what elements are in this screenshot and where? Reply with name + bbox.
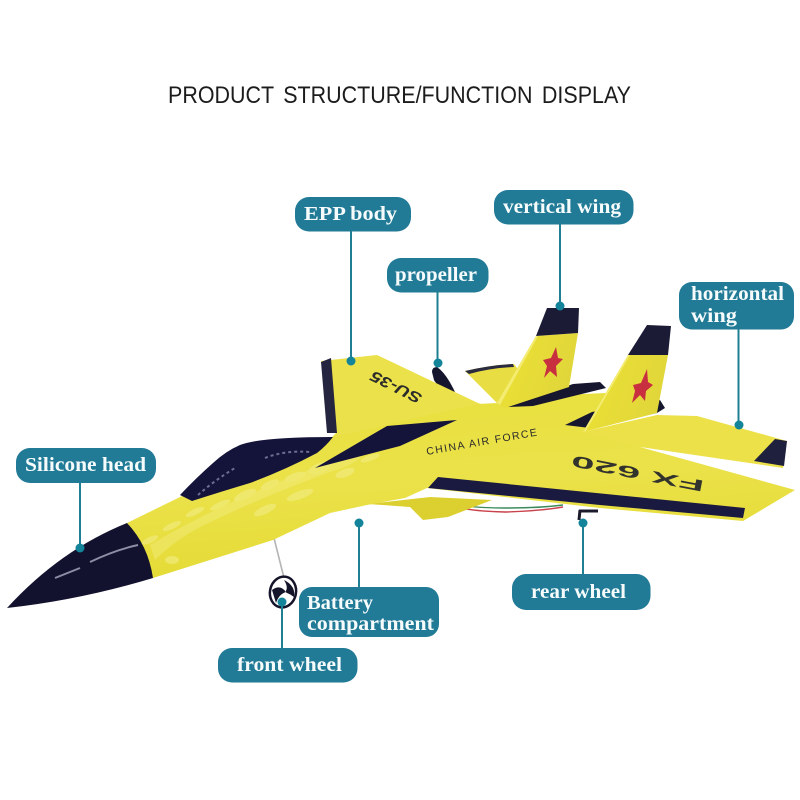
callout: propeller: propeller — [395, 264, 477, 286]
battery compartment — [368, 497, 492, 520]
star — [632, 369, 653, 403]
callout: rear wheel: rear wheel — [531, 581, 626, 603]
airplane illustration — [7, 308, 795, 610]
right tail fin — [583, 325, 671, 432]
left wing — [300, 355, 500, 470]
callout: battery compartment: Battery — [307, 592, 373, 614]
nose cone — [7, 523, 153, 608]
callout: rear wheel — [512, 518, 650, 610]
rear left stabilizer — [465, 364, 520, 403]
callout: EPP body: EPP body — [304, 203, 397, 225]
propeller — [432, 367, 455, 392]
front wheel — [267, 538, 299, 610]
canopy — [180, 437, 333, 501]
callout: horizontal wing: wing — [691, 305, 737, 327]
callout: silicone head: Silicone head — [25, 454, 146, 476]
callout: battery compartment: compartment — [307, 613, 434, 635]
nacelle behind tail — [565, 400, 665, 428]
callout: EPP body — [295, 197, 411, 366]
wing model lettering: FX 620 — [570, 451, 706, 494]
callout: battery compartment — [299, 518, 439, 637]
callout: horizontal wing — [679, 282, 794, 430]
wing text: SU-35 — [367, 367, 425, 407]
star — [543, 347, 563, 378]
callout: vertical wing: vertical wing — [503, 196, 621, 218]
right stabilizer — [578, 415, 787, 468]
wires — [437, 500, 563, 512]
rear wheel — [579, 510, 598, 520]
leading edge stripe — [428, 477, 745, 518]
callout: silicone head — [16, 448, 156, 552]
right engine nacelle — [508, 382, 606, 407]
fuselage lettering: CHINA AIR FORCE — [425, 427, 538, 458]
air intake — [315, 420, 457, 468]
callout: front wheel — [218, 598, 358, 682]
title: PRODUCT STRUCTURE/FUNCTION DISPLAY — [168, 82, 631, 109]
main fuselage and right wing — [127, 393, 795, 578]
callout: front wheel: front wheel — [237, 654, 342, 676]
left tail fin — [497, 308, 579, 408]
callout: horizontal wing: horizontal — [691, 283, 784, 305]
fuselage texture — [141, 448, 380, 564]
callout: propeller — [387, 258, 488, 368]
callout: vertical wing — [494, 190, 634, 310]
